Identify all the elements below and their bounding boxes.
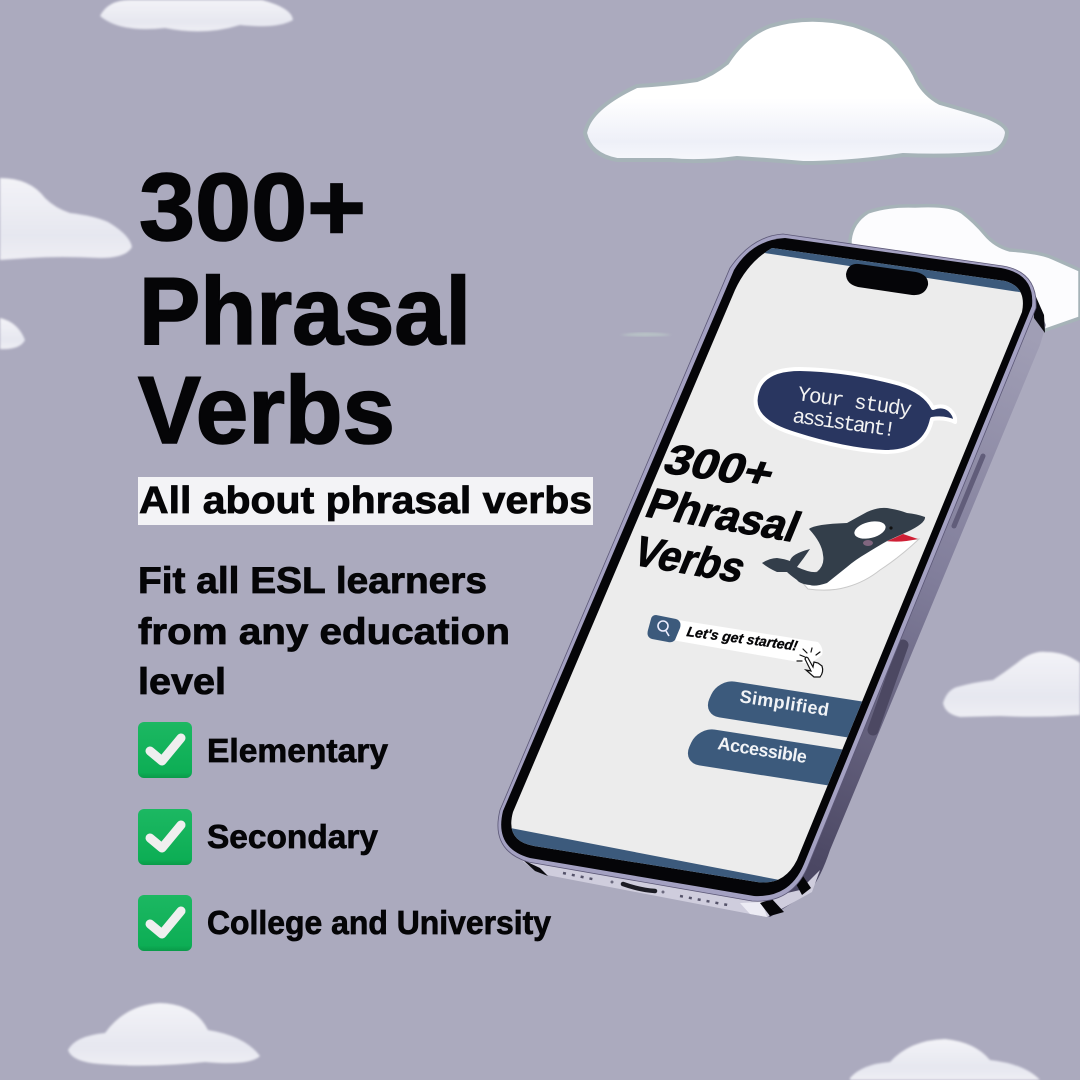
search bar: Let's get started!	[648, 615, 823, 677]
subtitle highlight: All about phrasal verbs: All about phrasal verbs	[139, 480, 592, 522]
item: Secondary	[138, 809, 379, 865]
speech bubble: Your study assistant!: assistant!	[791, 406, 897, 443]
item: Secondary: Secondary	[207, 818, 379, 855]
text block: audience description	[138, 560, 510, 702]
item: College and University: College and University	[207, 904, 552, 941]
bottom bar	[512, 828, 778, 882]
phone side body	[740, 290, 1046, 917]
button: Simplified	[708, 681, 862, 738]
item: College and University	[138, 895, 552, 951]
button: Simplified: Simplified	[738, 686, 830, 720]
text block: audience description: level	[138, 661, 226, 702]
phone heading: 300+ Phrasal Verbs: 300+	[657, 436, 782, 497]
item: Elementary: Elementary	[207, 732, 389, 769]
icon: clicking hand	[797, 648, 823, 677]
bottom edge with ports	[508, 290, 1045, 917]
side button	[954, 456, 983, 526]
phone heading: 300+ Phrasal Verbs	[640, 445, 803, 582]
heading: 300+ Phrasal Verbs: Verbs	[138, 357, 395, 464]
phone mockup	[490, 230, 1050, 917]
item: Elementary	[138, 722, 389, 778]
dynamic island	[846, 264, 928, 295]
screen	[511, 248, 1023, 882]
text block: audience description: Fit all ESL learners	[138, 560, 487, 601]
speech bubble: Your study assistant!	[756, 369, 955, 452]
black bezel	[501, 238, 1032, 896]
phone heading: 300+ Phrasal Verbs: Verbs	[626, 528, 753, 592]
speech bubble: Your study assistant!: Your study	[796, 384, 913, 423]
button: Accessible: Accessible	[716, 733, 808, 767]
orca mascot	[762, 508, 925, 590]
heading: 300+ Phrasal Verbs: Phrasal	[139, 258, 471, 365]
top bar	[764, 248, 1020, 292]
heading: 300+ Phrasal Verbs	[138, 154, 471, 464]
frame outline	[498, 234, 1036, 901]
button: Accessible	[688, 729, 842, 786]
phone heading: 300+ Phrasal Verbs: Phrasal	[639, 480, 808, 551]
text block: audience description: from any education	[138, 611, 510, 652]
heading: 300+ Phrasal Verbs: 300+	[139, 154, 366, 261]
icon: search	[648, 615, 680, 642]
search bar: Let's get started!: Let's get started!	[685, 623, 800, 654]
checklist: education levels	[138, 722, 552, 951]
